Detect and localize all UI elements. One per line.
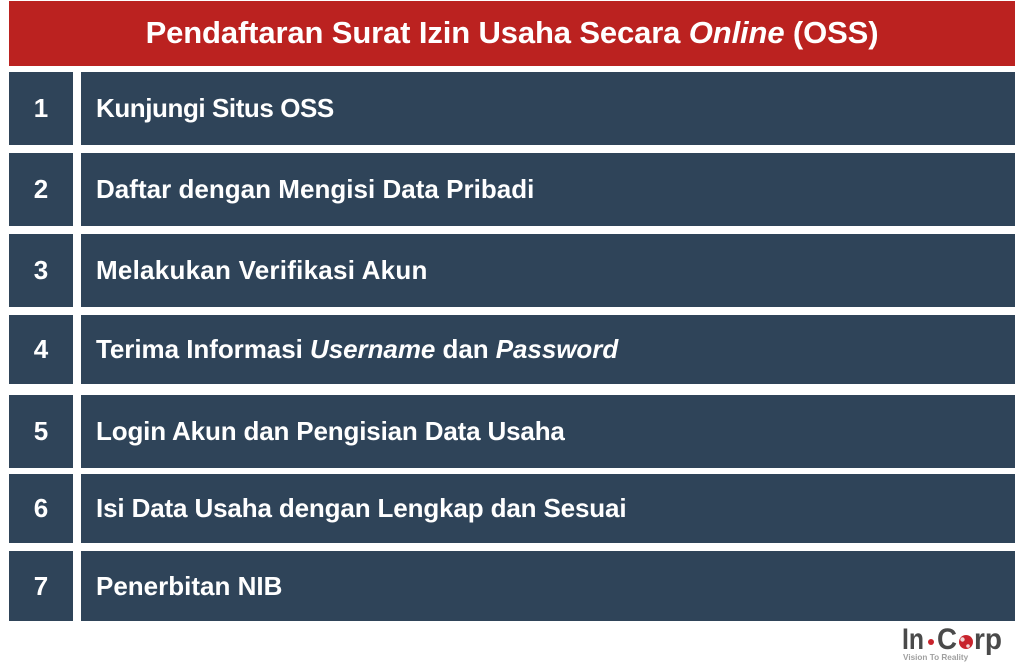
step 1 number: 1 (34, 93, 48, 123)
logo wordmark end: rp (974, 623, 1002, 656)
step 4 number (9, 315, 73, 384)
step 6 number (9, 474, 73, 543)
step 1 label (81, 72, 1015, 145)
step 2 number (9, 153, 73, 226)
logo: InCorp (902, 623, 1002, 662)
step 7 label (81, 551, 1015, 621)
step 5 label (81, 395, 1015, 468)
logo wordmark continued: C (937, 623, 957, 656)
step 4 label (81, 315, 1015, 384)
step 1 number (9, 72, 73, 145)
step 7 label: Penerbitan NIB (96, 571, 282, 601)
step 5 number (9, 395, 73, 468)
step 6 label: Isi Data Usaha dengan Lengkap dan Sesuai (96, 493, 626, 523)
title (9, 1, 1015, 66)
step 6 number: 6 (34, 493, 48, 523)
step 6 label (81, 474, 1015, 543)
step 3 label (81, 234, 1015, 307)
step 2 number: 2 (34, 174, 48, 204)
step 2 label: Daftar dengan Mengisi Data Pribadi (96, 174, 534, 204)
step 4 label: Terima Informasi Username dan Password (96, 334, 618, 364)
step 1 label: Kunjungi Situs OSS (96, 93, 334, 123)
step 7 number: 7 (34, 571, 48, 601)
step 3 number (9, 234, 73, 307)
step 5 number: 5 (34, 416, 48, 446)
step 4 number: 4 (34, 334, 48, 364)
logo tagline: Vision To Reality (903, 653, 969, 662)
step 2 label (81, 153, 1015, 226)
step 3 label: Melakukan Verifikasi Akun (96, 255, 428, 285)
logo red dot (928, 639, 934, 645)
logo wordmark: In (902, 623, 924, 656)
step 7 number (9, 551, 73, 621)
logo globe (959, 635, 973, 649)
step 3 number: 3 (34, 255, 48, 285)
step 5 label: Login Akun dan Pengisian Data Usaha (96, 416, 565, 446)
title: Pendaftaran Surat Izin Usaha Secara Online (OSS) (146, 15, 878, 50)
